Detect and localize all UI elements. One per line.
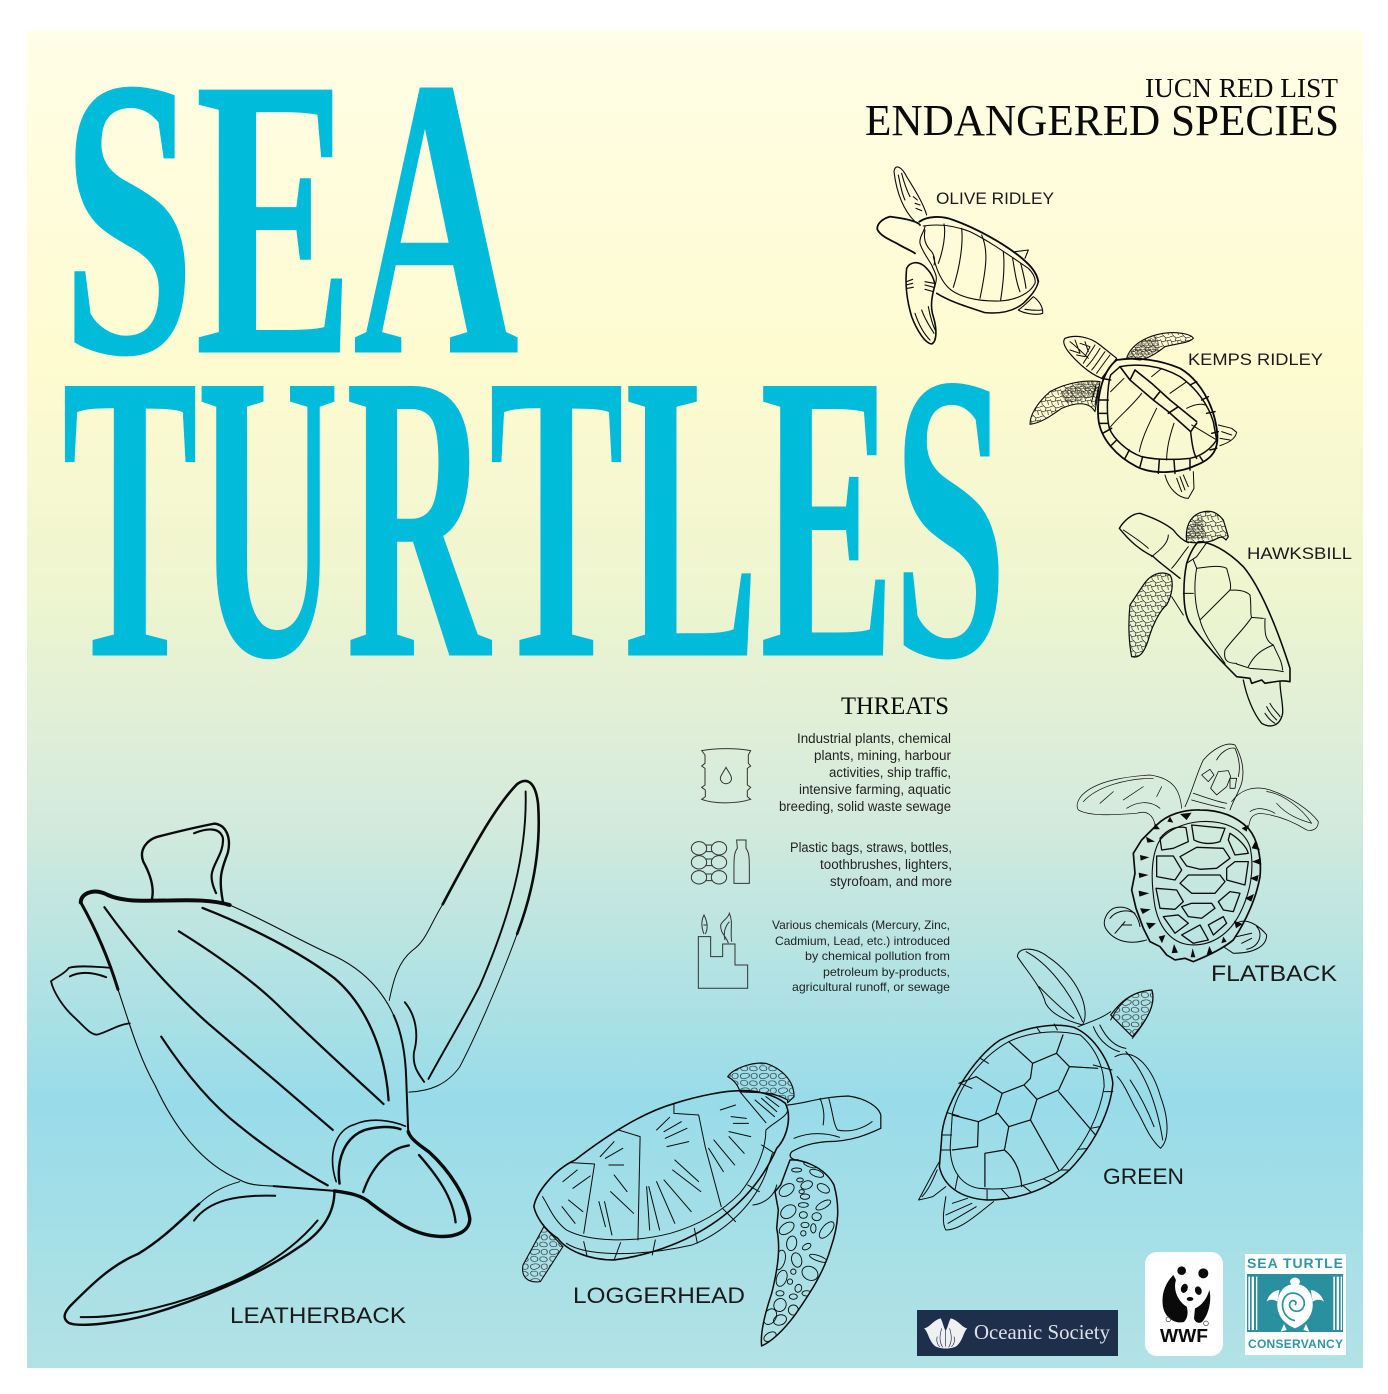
threat text: industrial — [779, 731, 952, 814]
heading: IUCN red list — [865, 73, 1339, 145]
threat text: plastic — [790, 840, 952, 889]
turtle: leatherback — [51, 781, 539, 1328]
threat text: chemicals: Cadmium, Lead, etc.) introduced — [775, 934, 950, 948]
WWF wordmark: WWF — [1160, 1326, 1208, 1346]
label: loggerhead: LOGGERHEAD — [573, 1283, 745, 1308]
threat text: industrial: plants, mining, harbour — [814, 748, 952, 763]
illustration: green — [919, 949, 1167, 1230]
logo mark: dolphins — [924, 1318, 967, 1348]
illustration: hawksbill — [1119, 511, 1290, 726]
turtle: green — [919, 949, 1184, 1230]
turtle: kemps ridley — [1030, 333, 1323, 498]
logo turtle mark — [1248, 1277, 1342, 1332]
label: hawksbill: HAWKSBILL — [1247, 544, 1352, 563]
label: kemps ridley: KEMPS RIDLEY — [1188, 350, 1323, 369]
icon: plastic rings and bottle — [691, 840, 749, 884]
title line: SEA: A — [353, 0, 519, 439]
threat text: industrial: Industrial plants, chemical — [797, 731, 951, 746]
logo text bottom: CONSERVANCY — [1248, 1337, 1343, 1351]
illustration: leatherback — [51, 781, 539, 1325]
turtle: hawksbill — [1119, 511, 1352, 726]
threat text: chemicals: by chemical pollution from — [805, 949, 950, 963]
illustration: flatback — [1077, 744, 1318, 962]
threat text: industrial: intensive farming, aquatic — [799, 782, 951, 797]
title line: TURTLES: T — [489, 290, 624, 744]
heading line 2: ENDANGERED SPECIES — [865, 96, 1339, 145]
title line: TURTLES: L — [625, 290, 759, 744]
illustration: olive ridley — [877, 167, 1043, 344]
threat text: plastic: Plastic bags, straws, bottles, — [790, 840, 952, 855]
threat text: industrial: breeding, solid waste sewage — [779, 799, 951, 814]
turtle: olive ridley — [877, 167, 1054, 344]
label: olive ridley: OLIVE RIDLEY — [936, 190, 1054, 208]
title line: TURTLES: E — [760, 290, 895, 744]
title line: TURTLES: U — [197, 290, 339, 744]
title line: SEA: E — [195, 0, 354, 439]
title line: TURTLES: T — [62, 290, 198, 744]
loggerhead front flipper — [761, 1160, 838, 1346]
panda — [1163, 1266, 1210, 1326]
text: S — [893, 290, 1007, 744]
label: leatherback: LEATHERBACK — [230, 1303, 406, 1328]
threats heading: THREATS — [841, 693, 949, 720]
icon: factory with smoke — [698, 913, 748, 988]
panel: threats — [691, 693, 952, 994]
logo text top: SEA TURTLE — [1247, 1255, 1343, 1271]
logo text: Oceanic Society — [974, 1320, 1110, 1344]
logo: WWF — [1145, 1252, 1223, 1356]
illustration: loggerhead — [523, 1063, 881, 1282]
label: green: GREEN — [1103, 1164, 1184, 1189]
threat text: chemicals — [772, 918, 950, 994]
threat text: chemicals: Various chemicals (Mercury, Zinc, — [772, 918, 950, 932]
logo: Sea Turtle Conservancy — [1245, 1254, 1346, 1355]
icon: oil barrel — [702, 749, 751, 803]
threat text: chemicals: agricultural runoff, or sewage — [792, 980, 950, 994]
threat text: plastic: toothbrushes, lighters, — [820, 857, 952, 872]
title line: TURTLES: R — [346, 290, 492, 744]
title — [62, 0, 1007, 744]
threat text: chemicals: petroleum by-products, — [823, 965, 950, 979]
threat text: plastic: styrofoam, and more — [830, 874, 952, 889]
turtle: flatback — [1077, 744, 1337, 986]
title line: SEA: S — [62, 0, 195, 439]
label: flatback: FLATBACK — [1211, 961, 1337, 986]
logo: Oceanic Society — [917, 1310, 1118, 1356]
illustration: kemps ridley — [1030, 333, 1237, 498]
threat text: industrial: activities, ship traffic, — [829, 765, 951, 780]
turtle: loggerhead — [523, 1063, 881, 1346]
heading line 1: IUCN RED LIST — [1145, 73, 1339, 103]
